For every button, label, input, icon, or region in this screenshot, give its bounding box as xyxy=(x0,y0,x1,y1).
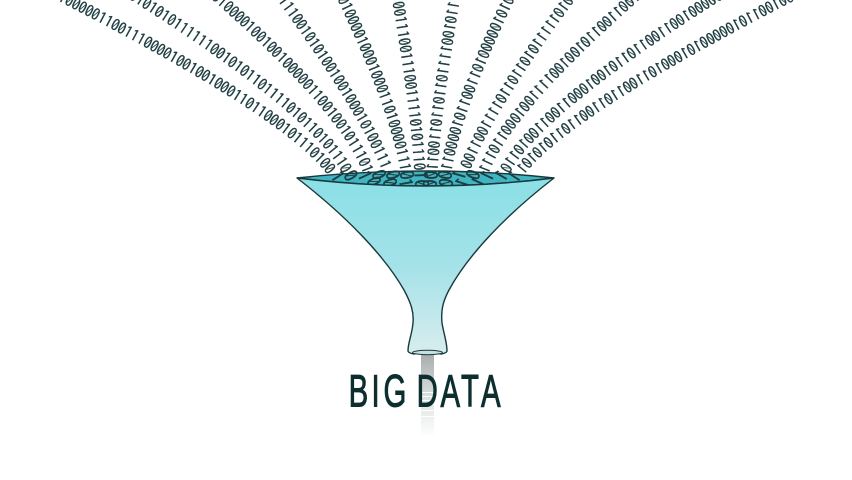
digits inside funnel mouth: right (mirrored): 0 xyxy=(437,177,457,189)
digits inside funnel mouth: left: 0 xyxy=(411,179,431,189)
digits inside funnel mouth: right (mirrored): 1 xyxy=(504,168,526,186)
digits inside funnel mouth: right (mirrored): 0 xyxy=(436,169,456,181)
digits inside funnel mouth: right (mirrored): 1 xyxy=(450,168,470,182)
digits inside funnel mouth: left: 1 xyxy=(395,177,415,189)
funnel mouth interior xyxy=(297,171,554,186)
digits inside funnel mouth: right (mirrored): 1 xyxy=(468,174,490,190)
digits inside funnel mouth: left: 0 xyxy=(382,168,402,182)
digits inside funnel mouth: right (mirrored): 0 xyxy=(422,170,442,180)
digits inside funnel mouth: right (mirrored): 0 xyxy=(421,179,441,189)
digits inside funnel mouth: left: 1 xyxy=(353,168,375,184)
digits inside funnel mouth: left: 0 xyxy=(339,167,361,185)
digits inside funnel mouth: left xyxy=(326,167,431,190)
title: BIG DATA xyxy=(349,366,501,417)
digits inside funnel mouth: left: 0 xyxy=(396,169,416,181)
digits inside funnel mouth: right (mirrored): 1 xyxy=(491,167,513,185)
funnel spout opening xyxy=(412,350,442,355)
funnel body xyxy=(297,178,554,354)
digits inside funnel mouth: left: 0 xyxy=(378,176,400,190)
digits inside funnel mouth: left: 1 xyxy=(410,170,430,180)
digits inside funnel mouth: left: 0 xyxy=(362,174,384,190)
digits inside funnel mouth: right (mirrored) xyxy=(421,167,526,190)
digits inside funnel mouth: right (mirrored): 0 xyxy=(463,167,485,183)
falling data stream xyxy=(421,355,434,437)
digits inside funnel mouth: left: 0 xyxy=(367,167,389,183)
digits inside funnel mouth: left: 1 xyxy=(326,168,348,186)
digits inside funnel mouth: right (mirrored): 1 xyxy=(452,176,474,190)
digits inside funnel mouth: right (mirrored): 1 xyxy=(477,168,499,184)
